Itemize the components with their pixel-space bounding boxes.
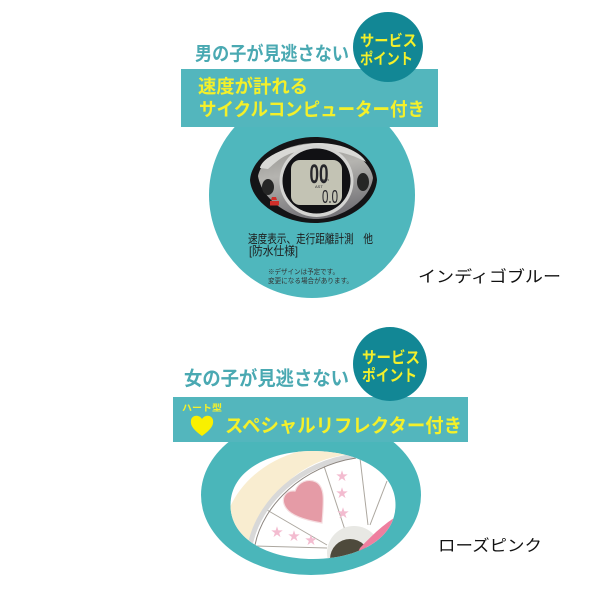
spokes <box>255 458 387 548</box>
star decorations <box>271 469 349 547</box>
star decorations: ★ <box>336 486 348 500</box>
icon: cycle computer: 00 <box>310 159 328 189</box>
pink chain guard <box>358 518 394 551</box>
large teal circle <box>209 92 415 298</box>
rim <box>250 456 356 546</box>
teal oval <box>201 415 421 575</box>
infographic canvas <box>173 12 560 575</box>
banner: cycle computer <box>181 69 438 127</box>
icon: cycle computer: 0.0 <box>322 187 338 207</box>
banner: cycle computer: 速度が計れる <box>198 76 308 97</box>
banner: heart reflector: スペシャルリフレクター付き <box>225 415 462 437</box>
icon: cycle computer <box>250 137 377 223</box>
panel: girls service point <box>173 327 468 580</box>
text: design note <box>268 267 353 285</box>
badge: service point: サービス <box>362 348 420 367</box>
star decorations: ★ <box>337 506 349 520</box>
star decorations: ★ <box>288 529 300 543</box>
label: indigo blue: インディゴブルー <box>418 267 561 286</box>
text: design note: ※デザインは予定です。 <box>268 267 339 276</box>
banner: heart reflector: ハート型 <box>182 402 222 413</box>
heading: girls: 女の子が見逃さない <box>184 367 349 390</box>
icon: cycle computer: km/h <box>320 177 329 182</box>
tyre <box>230 451 346 542</box>
text: design note: 変更になる場合があります。 <box>268 276 353 285</box>
text: features <box>248 231 373 258</box>
badge: service point: ポイント <box>362 367 417 385</box>
icon: cycle computer: AST <box>315 184 323 189</box>
heart reflector <box>283 480 323 523</box>
badge: service point <box>353 327 427 401</box>
panel: boys service point <box>181 12 438 298</box>
heading: boys: 男の子が見逃さない <box>195 42 349 65</box>
label: rose pink: ローズピンク <box>438 537 542 555</box>
star decorations: ★ <box>305 533 317 547</box>
banner: heart reflector <box>173 397 468 442</box>
star decorations: ★ <box>336 469 348 483</box>
text: features: [防水仕様] <box>249 243 298 258</box>
star decorations: ★ <box>271 525 283 539</box>
badge: service point <box>353 12 423 82</box>
text: features: 速度表示、走行距離計測 他 <box>248 231 373 246</box>
banner: cycle computer: サイクルコンピューター付き <box>199 99 425 120</box>
hub <box>327 526 377 558</box>
badge: service point: サービス <box>360 31 417 50</box>
badge: service point: ポイント <box>360 50 413 68</box>
photo: wheel with heart reflector <box>230 451 396 559</box>
